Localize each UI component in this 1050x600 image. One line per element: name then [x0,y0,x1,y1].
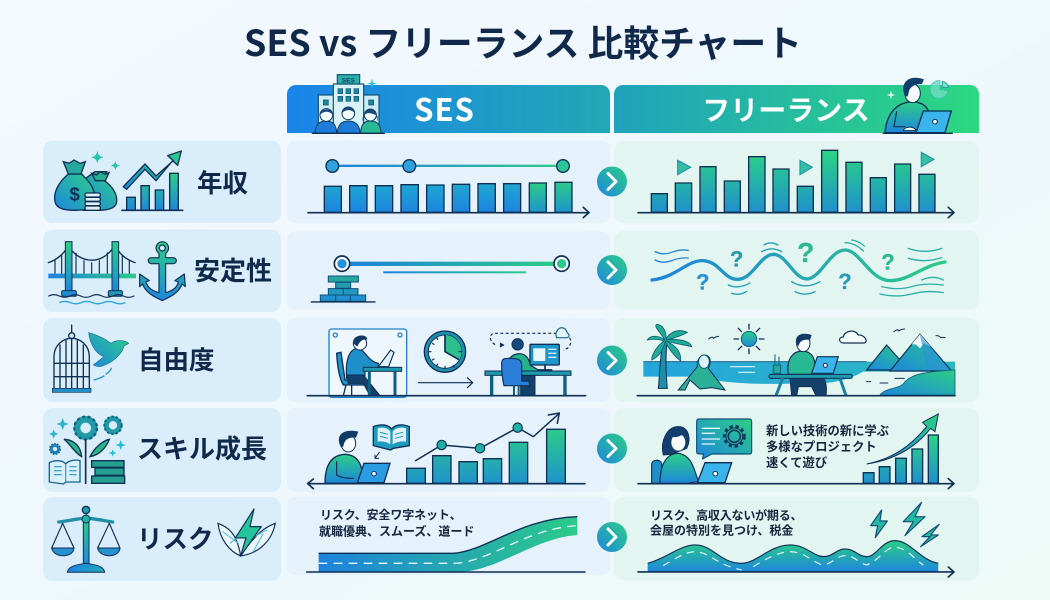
illustration: income waves and lightning [638,502,954,577]
text: スキル成長: スキル成長 [137,429,267,466]
icon: money bags and rising chart: $ [69,184,80,205]
text: freelance risk note: 会屋の特別を見つけ、税金 [650,522,793,538]
cell: SES risk [287,497,610,575]
icon: office building with staff: SES [342,77,356,84]
panel: stability label [43,230,281,312]
cell: freelance income [614,141,979,223]
icon: office building with staff [312,75,384,133]
text: 安定性: 安定性 [194,251,272,288]
chart: wavy uncertain line with question marks: ? [881,249,895,274]
arrow: stability comparison [597,255,627,285]
icon: anchor [140,242,185,301]
panel: skill growth label [43,408,281,492]
illustration: learner with book and growth chart [308,413,585,489]
chart: wavy uncertain line with question marks: ? [696,269,709,294]
text: 年収: 年収 [197,163,249,200]
arrow: income comparison [597,166,627,196]
chart: fluctuating income bars [638,150,954,218]
text: freelance skill note [766,421,890,471]
heading text: フリーランス: フリーランス [702,89,870,129]
text: リスク: リスク [137,519,214,556]
panel: risk label [43,497,281,581]
icon: gears plant and books [49,417,126,484]
icon: birdcage and bird [52,325,129,392]
chart: flat salary bars [308,160,589,218]
cell: freelance freedom [614,318,979,402]
panel: row labels column [43,140,281,581]
heading text: SES: SES [414,85,475,130]
illustration: woman with laptop and gear bubble [638,414,954,489]
text: freelance risk note [650,506,802,538]
arrow: freedom comparison [597,346,627,376]
icon: money bags and rising chart [55,151,183,210]
chart: stable line on brick foundation [311,256,569,302]
text: freelance skill note: 新しい技術の新に学ぶ [766,421,890,439]
cell: SES skill growth [287,408,610,492]
icon: freelancer at laptop [883,78,952,133]
text: freelance skill note: 多様なプロジェクト [766,437,877,455]
cell: SES freedom [287,318,610,402]
chart: wavy uncertain line with question marks: ? [730,247,743,272]
header: freelance [614,78,979,133]
text: 自由度: 自由度 [138,340,215,377]
panel: annual income label [43,140,281,223]
arrow: risk comparison [597,522,627,552]
panel: SES column [287,75,610,575]
text: SES risk note: 就職優典、スムーズ、道ード [319,522,474,540]
cell: freelance stability [614,231,979,310]
icon: lightning over safety net [218,509,275,556]
cell: SES income [287,140,610,223]
text: freelance risk note: リスク、高収入ないが期る、 [650,506,802,524]
cell: freelance risk [614,497,979,580]
text: SES risk note [319,506,474,540]
cell: freelance skill growth [614,408,979,492]
illustration: working from the beach [637,324,955,396]
icon: balance scales [52,506,120,572]
icon: suspension bridge [48,242,136,304]
illustration: office worker, clock and desk [307,328,586,397]
text: SES risk note: リスク、安全ワ字ネット、 [320,506,461,523]
chart: wavy uncertain line with question marks: ? [797,237,814,268]
arrow: skill comparison [597,434,627,464]
chart: wavy uncertain line with question marks [652,237,945,296]
header: SES [287,75,610,133]
illustration: smooth road [307,517,585,572]
text: freelance skill note: 速くて遊び [766,453,828,471]
title: SES vs フリーランス 比較チャート [244,15,802,67]
panel: freedom label [43,318,281,402]
chart: wavy uncertain line with question marks: ? [838,269,852,294]
cell: SES stability [287,232,610,310]
panel: freelance column [614,78,979,580]
